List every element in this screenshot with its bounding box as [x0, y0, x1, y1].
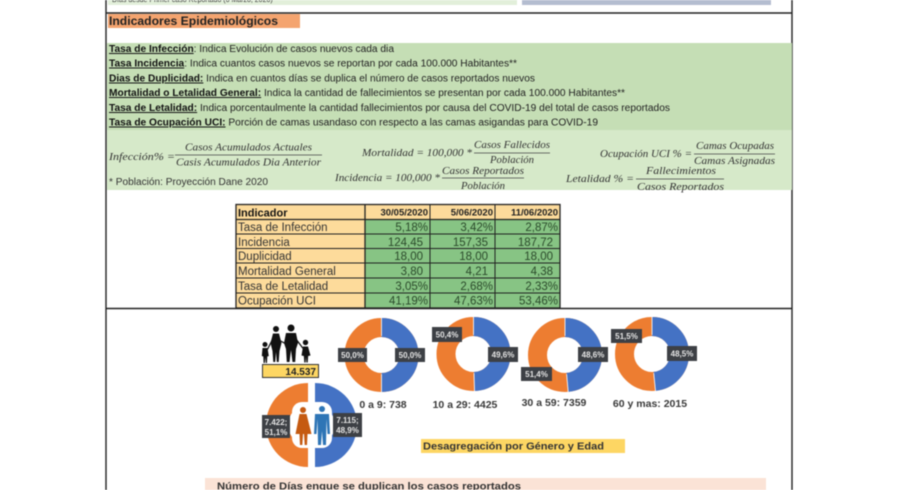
row: mortalidad general: [238, 266, 553, 278]
donut: 60 y mas: 51,5%: [615, 332, 638, 341]
row: duplicidad: 18,00: [524, 251, 553, 263]
donut: 30 a 59: 48,6%: [582, 350, 604, 360]
formula: letalidad: Casos Reportados: [637, 181, 724, 193]
donut: 0 a 9: 50,0%: [341, 351, 364, 360]
donut: 0 a 9: [338, 318, 425, 392]
age captions: 30 a 59: 7359: [522, 397, 587, 409]
donut: 0 a 9: 50,0%: [399, 351, 421, 360]
formula: ocupación UCI: Camas Asignadas: [694, 155, 775, 167]
definition: tasa de letalidad: Tasa de Letalidad: Indica porcentaulmente la cantidad fallecimientos por causa del COVID-19 del total de casos reportados: [109, 103, 670, 114]
donut: 10 a 29: [432, 317, 518, 391]
label: mujeres: 51,1%: [265, 428, 287, 437]
formula: letalidad: Letalidad % =: [565, 173, 634, 185]
row: tasa de letalidad: Tasa de Letalidad: [238, 281, 328, 293]
formula: mortalidad: [361, 139, 550, 166]
formula: incidencia: Casos Reportados: [442, 165, 524, 177]
formula: incidencia: Población: [460, 180, 505, 192]
row: ocupación UCI: 47,63%: [454, 296, 493, 308]
age captions: 0 a 9: 738: [359, 399, 407, 411]
donut: 60 y mas: [611, 317, 697, 391]
formula: ocupación UCI: Camas Ocupadas: [696, 140, 774, 152]
caption: Desagregación por Género y Edad: Desagregación por Género y Edad: [423, 440, 604, 452]
row: incidencia: 187,72: [518, 237, 553, 249]
label: mujeres: 7.422;: [265, 418, 287, 427]
row: tasa de letalidad: [238, 281, 558, 293]
donut: 30 a 59: 51,4%: [525, 370, 548, 379]
panel: indicator definitions: [107, 43, 792, 130]
label: hombres: [333, 413, 362, 437]
row: duplicidad: 18,00: [459, 251, 488, 263]
formula: mortalidad: Población: [489, 154, 534, 166]
icon: man: [314, 406, 330, 445]
top strip: previous panel remainder: [108, 0, 771, 5]
icon: woman: [296, 407, 312, 445]
formula: incidencia: [334, 165, 524, 192]
row: tasa de letalidad: 3,05%: [395, 281, 428, 293]
panel frame: [106, 0, 792, 490]
definition: mortalidad: Mortalidad o Letalidad General: Indica la cantidad de fallecimientos se presentan por cada 100.000 Habitantes**: [109, 88, 625, 99]
table header row: 5/06/2020: [451, 208, 493, 218]
donut: 30 a 59: [521, 318, 608, 392]
age captions: 60 y mas: 2015: [613, 398, 687, 410]
definition: tasa incidencia: Tasa Incidencia : Indica cuantos casos nuevos se reportan por cada 100.000 Habitantes**: [109, 58, 517, 70]
table header row: 30/05/2020: [380, 208, 428, 218]
total cases badge: [262, 364, 318, 378]
donut: 10 a 29: 49,6%: [492, 350, 514, 360]
row: tasa de infección: 3,42%: [460, 222, 493, 234]
row: incidencia: 124,45: [388, 237, 423, 249]
formula: letalidad: Fallecimientos: [645, 165, 716, 177]
formula: letalidad: [565, 165, 724, 193]
row: ocupación UCI: Ocupación UCI: [238, 296, 316, 308]
panel: formulas: [107, 130, 792, 193]
row: mortalidad general: 3,80: [401, 266, 423, 278]
row: tasa de letalidad: 2,33%: [525, 281, 558, 293]
age captions: 10 a 29: 4425: [433, 399, 498, 411]
heading: Indicadores Epidemiológicos: Indicadores Epidemiológicos: [109, 16, 278, 28]
formula: ocupación UCI: [600, 140, 775, 167]
row: ocupación UCI: 53,46%: [519, 296, 558, 308]
formula: mortalidad: Mortalidad = 100,000 *: [361, 147, 473, 159]
table header row: Indicador: [238, 208, 288, 220]
row: tasa de infección: 2,87%: [525, 222, 558, 234]
row: duplicidad: Duplicidad: [238, 251, 292, 263]
row: duplicidad: 18,00: [394, 251, 423, 263]
label: mujeres: [262, 415, 290, 438]
donut: gender: [262, 383, 362, 467]
table header row: 11/06/2020: [511, 208, 558, 218]
row: tasa de infección: Tasa de Infección: [238, 222, 328, 234]
table header row: [238, 208, 558, 220]
heading: número de días: [205, 478, 766, 490]
note: población: * Población: Proyección Dane 2020: [109, 177, 268, 188]
donut: 10 a 29: 50,4%: [436, 330, 458, 340]
row: ocupación UCI: 41,19%: [389, 296, 428, 308]
definition: tasa de infección: Tasa de Infección : Indica Evolución de casos nuevos cada dia: [109, 44, 395, 55]
row: tasa de letalidad: 2,68%: [460, 281, 493, 293]
row: incidencia: [238, 237, 553, 249]
row: mortalidad general: Mortalidad General: [238, 266, 336, 278]
row: tasa de infección: 5,18%: [395, 222, 428, 234]
row: tasa de infección: [238, 222, 558, 234]
formula: infección: Casis Acumulados Dia Anterior: [176, 156, 322, 168]
formula: mortalidad: Casos Fallecidos: [474, 139, 550, 151]
age captions: [359, 397, 687, 411]
formula: ocupación UCI: Ocupación UCI % =: [600, 148, 692, 160]
row: mortalidad general: 4,38: [531, 266, 553, 278]
row: incidencia: Incidencia: [238, 237, 290, 249]
total cases badge: 14.537: [285, 367, 316, 378]
row: mortalidad general: 4,21: [466, 266, 488, 278]
row: incidencia: 157,35: [453, 237, 488, 249]
definition: ocupación UCI: Tasa de Ocupación UCI: Porción de camas usandaso con respecto a las camas asigandas para COVID-19: [109, 118, 598, 128]
table: indicadores: [236, 204, 560, 308]
icon: family silhouette: [262, 324, 310, 363]
row: duplicidad: [238, 251, 553, 263]
formula: incidencia: Incidencia = 100,000 *: [334, 172, 440, 184]
formula: infección: Casos Acumulados Actuales: [185, 142, 312, 154]
formula: infección: Infección% =: [108, 151, 175, 163]
row: ocupación UCI: [238, 296, 558, 308]
formula: infección: [108, 142, 322, 168]
definition: días de duplicidad: Dias de Duplicidad: Indica en cuantos días se duplica el número de casos reportados nuevos: [109, 74, 535, 84]
label: hombres: 48,9%: [336, 426, 359, 435]
label: hombres: 7.115;: [336, 416, 359, 425]
donut: 60 y mas: 48,5%: [671, 350, 693, 358]
